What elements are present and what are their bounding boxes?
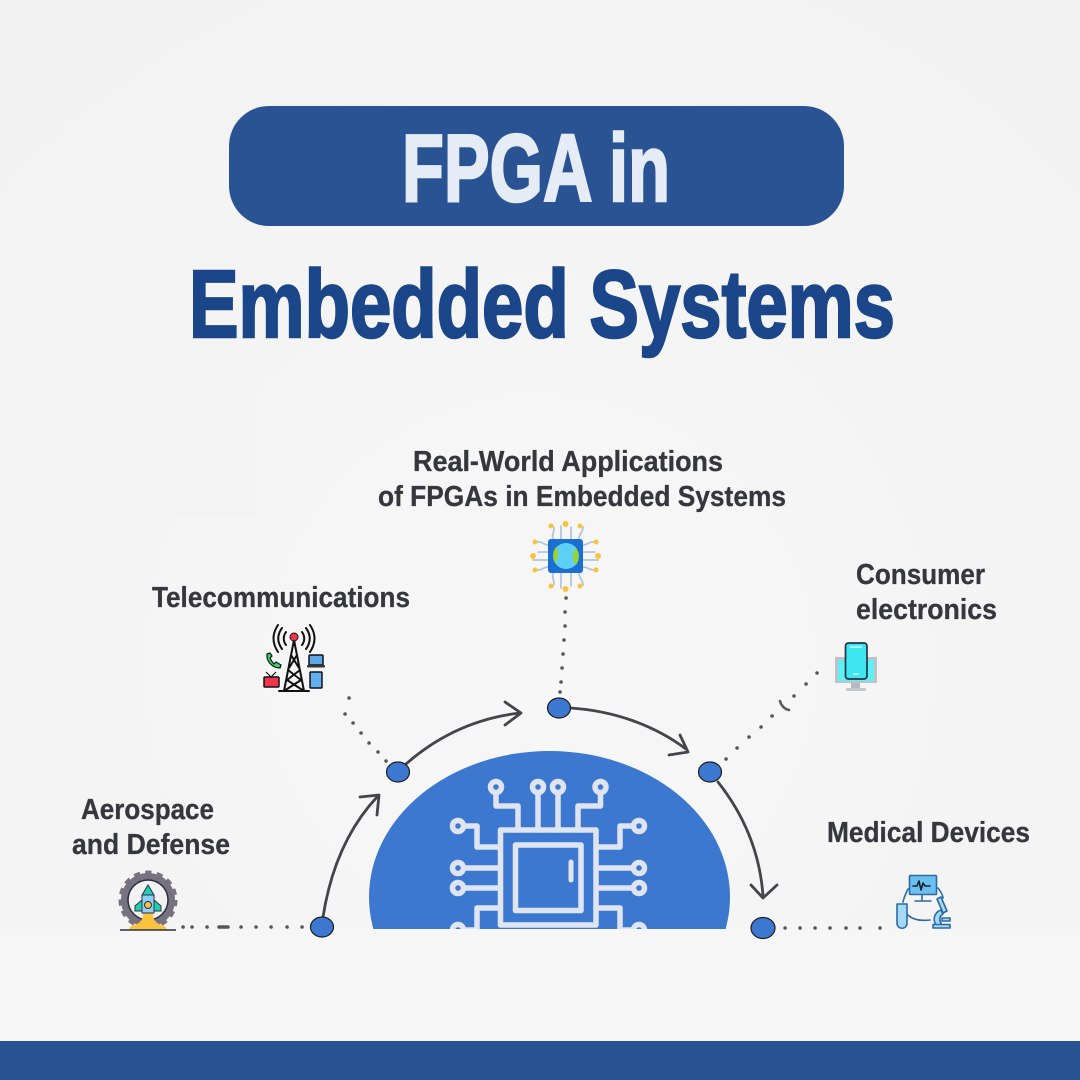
arrow: real-world to consumer (571, 708, 688, 755)
title line: Embedded Systems: Embedded Systems (189, 251, 895, 358)
central dome with chip icon (369, 751, 730, 929)
heading: real-world applications: of FPGAs in Embedded Systems (378, 481, 786, 513)
label: telecommunications: Telecommunications (152, 582, 410, 614)
title pill (229, 106, 844, 226)
label: consumer electronics: electronics (856, 594, 997, 626)
dotted line: consumer (726, 673, 817, 759)
label: consumer electronics (856, 559, 997, 626)
bottom band (0, 1041, 1080, 1080)
label: consumer electronics: Consumer (856, 559, 985, 591)
arrow: telecom to real-world (406, 702, 521, 764)
icon: medical monitor and microscope (897, 876, 950, 928)
label: medical devices: Medical Devices (827, 817, 1030, 849)
heading: real-world applications: Real-World Applications (413, 446, 723, 478)
icon: globe on chip (530, 521, 601, 592)
title line: FPGA in: FPGA in (402, 115, 670, 222)
dotted line: aerospace (183, 925, 302, 929)
icon: phone and monitor (835, 643, 877, 691)
heading: real-world applications (378, 446, 786, 513)
icon: telecom tower (264, 625, 325, 691)
label: aerospace and defense: Aerospace (81, 794, 214, 826)
nodes (310, 698, 775, 938)
icon: processor chip (452, 782, 644, 936)
arrow: consumer to medical (718, 782, 777, 898)
arrow: aerospace to telecom (323, 795, 379, 917)
dotted line: telecommunications (345, 698, 386, 761)
dotted line: medical (785, 926, 880, 930)
dotted line: real-world (560, 598, 566, 692)
label: aerospace and defense: and Defense (72, 829, 230, 861)
label: aerospace and defense (72, 794, 230, 861)
icon: rocket in gear (120, 873, 176, 930)
